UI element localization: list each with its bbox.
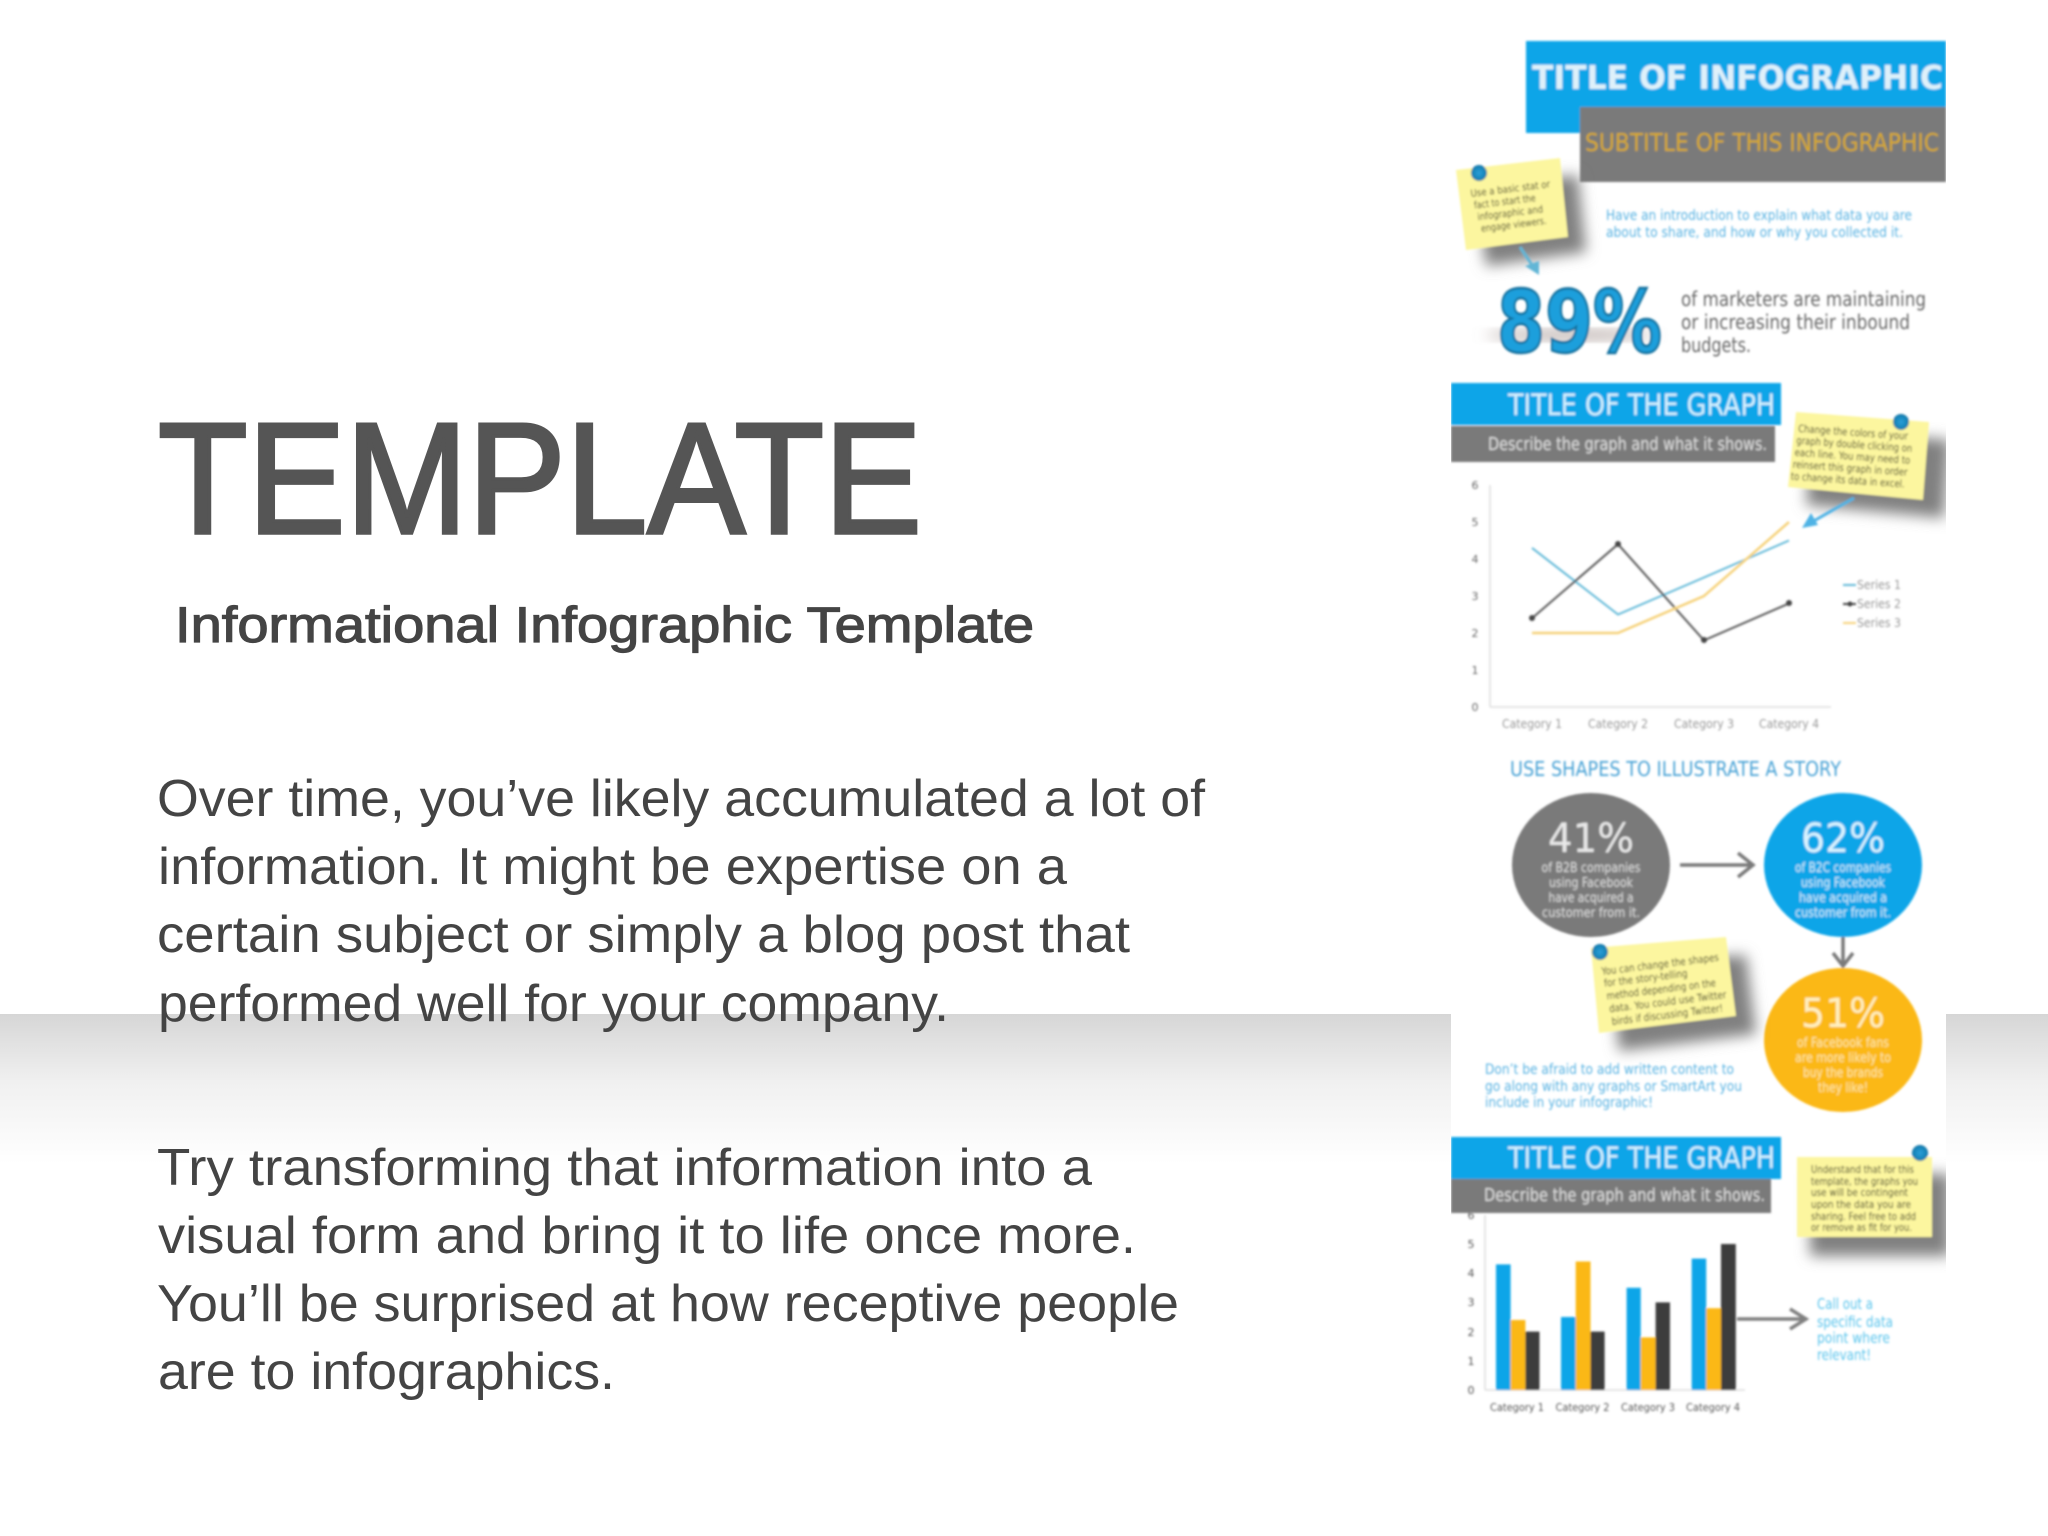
sticky note: start with a stat: infographic and: [1477, 204, 1544, 223]
title: TEMPLATE: [158, 391, 922, 567]
circle: 51% yellow: buy the brands: [1803, 1066, 1883, 1081]
circle: 62% blue: of B2C companies: [1795, 861, 1891, 876]
text block: first paragraph: information. It might be expertise on a: [158, 838, 1067, 896]
sticky note: change the shapes: You can change the shapes: [1600, 952, 1719, 978]
bar chart: 1: [1468, 1355, 1474, 1368]
stat: 89% of marketers: budgets.: [1681, 333, 1751, 357]
text block: second paragraph: Try transforming that information into a: [157, 1139, 1092, 1197]
header: bar graph title: [1451, 1137, 1781, 1213]
text block: second paragraph: You’ll be surprised at how receptive people: [157, 1275, 1179, 1333]
arrow: blue to yellow circle: [1833, 937, 1853, 966]
text block: written content note: go along with any graphs or SmartArt you: [1485, 1079, 1742, 1095]
panel: infographic thumbnail: [1451, 39, 1946, 1414]
text block: second paragraph: visual form and bring it to life once more.: [158, 1207, 1136, 1265]
sticky note: start with a stat: engage viewers.: [1480, 216, 1547, 235]
circle: 51% yellow: they like!: [1818, 1081, 1868, 1096]
text block: introduction: about to share, and how or why you collected it.: [1606, 225, 1903, 241]
line chart: Category 2: [1588, 717, 1648, 731]
callout: specific data point: point where: [1817, 1329, 1890, 1347]
text block: first paragraph: [157, 770, 1206, 1033]
circle: 62% blue: 62%: [1801, 816, 1885, 862]
header: bar graph title: TITLE OF THE GRAPH: [1507, 1141, 1775, 1175]
line chart: 2: [1472, 627, 1478, 640]
sticky note: change the shapes: [1591, 937, 1756, 1051]
circle: 41% grey: customer from it.: [1542, 906, 1640, 921]
sticky note: start with a stat: Use a basic stat or: [1470, 179, 1552, 200]
bar chart: 3: [1468, 1296, 1474, 1309]
bar chart: 0: [1468, 1384, 1474, 1397]
circle: 62% blue: using Facebook: [1801, 876, 1885, 891]
line chart: 5: [1472, 516, 1478, 529]
bar chart: 2: [1468, 1326, 1474, 1339]
line chart: 6: [1472, 479, 1478, 492]
bar chart: 5: [1468, 1238, 1474, 1251]
sticky note: graphs contingent: upon the data you are: [1811, 1199, 1911, 1211]
circle: 62% blue: [1764, 793, 1922, 937]
circle: 41% grey: [1512, 793, 1670, 937]
text block: second paragraph: [157, 1139, 1179, 1401]
line chart: Category 3: [1674, 717, 1734, 731]
line chart: 1: [1472, 664, 1478, 677]
sticky note: change the colors: Change the colors of your: [1798, 423, 1909, 443]
sticky note: change the shapes: method depending on the: [1606, 977, 1717, 1003]
circle: 51% yellow: of Facebook fans: [1797, 1036, 1889, 1051]
sticky note: graphs contingent: or remove as fit for you.: [1811, 1222, 1912, 1234]
sticky note: change the colors: graph by double clicking on: [1796, 435, 1913, 455]
circle: 51% yellow: are more likely to: [1795, 1051, 1891, 1066]
text block: second paragraph: are to infographics.: [158, 1343, 615, 1401]
subtitle: Informational Infographic Template: [175, 597, 1034, 653]
arrow: grey to blue circle: [1680, 853, 1753, 877]
circle: 51% yellow: [1764, 968, 1922, 1112]
circle: 51% yellow: 51%: [1801, 991, 1885, 1037]
circle: 41% grey: have acquired a: [1548, 891, 1634, 906]
circle: 41% grey: using Facebook: [1549, 876, 1633, 891]
sticky note: change the colors: each line. You may need to: [1794, 447, 1911, 467]
arrow: sticky to line chart: [1802, 498, 1854, 528]
bar chart: Category 3: [1621, 1401, 1675, 1414]
line chart: Category 1: [1502, 717, 1562, 731]
line chart: 4: [1472, 553, 1478, 566]
sticky note: change the colors: reinsert this graph in order: [1792, 459, 1908, 479]
callout: specific data point: relevant!: [1817, 1346, 1871, 1364]
header: infographic title banner: TITLE OF INFOGRAPHIC: [1532, 58, 1943, 97]
bars: series yellow: [1511, 1262, 1721, 1390]
bar chart: 6: [1468, 1209, 1474, 1222]
text block: first paragraph: Over time, you’ve likely accumulated a lot of: [157, 770, 1206, 828]
sticky note: change the shapes: birds if discussing Twitter!: [1611, 1003, 1724, 1028]
callout: specific data point: [1817, 1295, 1893, 1364]
bar chart: Category 4: [1686, 1401, 1740, 1414]
sticky note: graphs contingent: Understand that for this: [1811, 1164, 1914, 1176]
chart legend: Series 1: [1857, 578, 1901, 592]
sticky note: graphs contingent: sharing. Feel free to add: [1811, 1211, 1916, 1223]
sticky note: graphs contingent: use will be contingent: [1811, 1187, 1908, 1199]
circle: 62% blue: have acquired a: [1799, 891, 1887, 906]
sticky note: change the shapes: for the story-telling: [1603, 968, 1688, 990]
line chart: 3: [1472, 590, 1478, 603]
bars: series blue: [1496, 1259, 1706, 1390]
sticky note: change the colors: [1788, 412, 1950, 518]
circle: 41% grey: of B2B companies: [1542, 861, 1641, 876]
bar chart: Category 2: [1556, 1401, 1610, 1414]
sticky note: graphs contingent: template, the graphs you: [1811, 1176, 1918, 1188]
arrow: bar to callout: [1737, 1309, 1806, 1329]
text block: written content note: [1485, 1062, 1742, 1111]
sticky note: change the shapes: data. You could use Twitter: [1609, 989, 1728, 1015]
bar chart: 4: [1468, 1267, 1474, 1280]
header: bar graph title: Describe the graph and what it shows.: [1484, 1185, 1765, 1206]
heading: use shapes: USE SHAPES TO ILLUSTRATE A STORY: [1510, 757, 1842, 781]
header: line graph title: Describe the graph and what it shows.: [1488, 434, 1767, 455]
text block: first paragraph: certain subject or simply a blog post that: [157, 906, 1131, 964]
stat: 89% of marketers: [1486, 285, 1926, 358]
chart legend: Series 2: [1857, 597, 1901, 611]
bar chart: [1468, 1209, 1745, 1414]
stat: 89% of marketers: 89%: [1497, 273, 1662, 373]
header: line graph title: [1451, 383, 1781, 462]
bars: series dark: [1525, 1244, 1736, 1390]
text block: introduction: Have an introduction to explain what data you are: [1606, 208, 1912, 224]
sticky note: start with a stat: [1456, 158, 1586, 266]
sticky note: graphs contingent: [1797, 1145, 1950, 1256]
bar chart: Category 1: [1490, 1401, 1544, 1414]
chart legend: [1843, 578, 1901, 630]
callout: specific data point: Call out a: [1817, 1295, 1873, 1313]
stat: 89% of marketers: or increasing their inbound: [1681, 310, 1910, 334]
chart legend: Series 3: [1857, 616, 1901, 630]
callout: specific data point: specific data: [1817, 1313, 1893, 1331]
header: infographic title banner: SUBTITLE OF THIS INFOGRAPHIC: [1585, 128, 1939, 157]
header: line graph title: TITLE OF THE GRAPH: [1507, 388, 1775, 422]
sticky note: start with a stat: fact to start the: [1473, 193, 1536, 212]
line chart: 0: [1472, 701, 1478, 714]
arrow: sticky to stat: [1520, 247, 1539, 275]
line chart: Category 4: [1759, 717, 1819, 731]
stat: 89% of marketers: of marketers are maintaining: [1681, 287, 1926, 311]
text block: first paragraph: performed well for your company.: [158, 975, 949, 1033]
circle: 41% grey: 41%: [1548, 816, 1634, 862]
line chart: [1472, 479, 1901, 731]
header: infographic title banner: [1526, 41, 1946, 182]
text block: written content note: include in your infographic!: [1485, 1095, 1653, 1111]
text block: introduction: [1606, 208, 1912, 241]
circle: 62% blue: customer from it.: [1795, 906, 1891, 921]
sticky note: change the colors: to change its data in excel.: [1790, 471, 1905, 491]
text block: written content note: Don’t be afraid to add written content to: [1485, 1062, 1734, 1078]
